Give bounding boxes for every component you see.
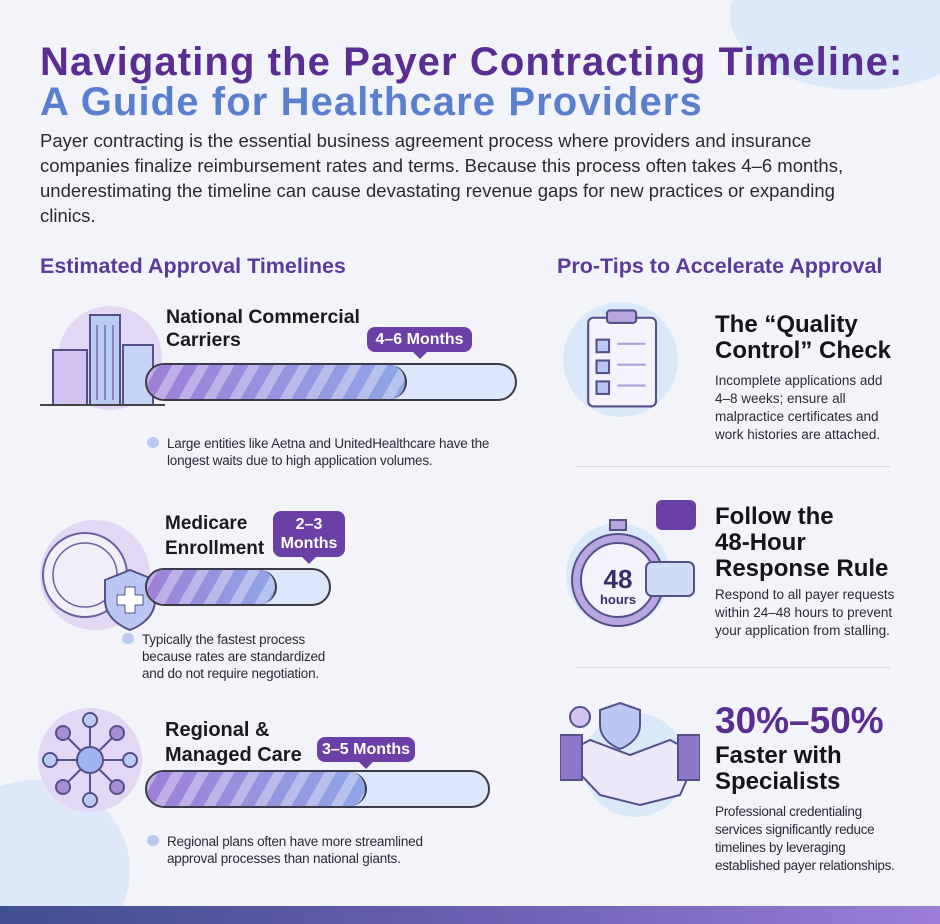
text: The “Quality bbox=[715, 311, 858, 338]
text: Follow the bbox=[715, 503, 834, 530]
label bbox=[165, 513, 264, 559]
tip: 48-hour rule bbox=[566, 500, 894, 638]
panel: national commercial bbox=[40, 306, 517, 468]
footer band bbox=[0, 906, 940, 924]
text: Response Rule bbox=[715, 555, 888, 582]
badge bbox=[273, 511, 345, 557]
icon: handshake bbox=[560, 702, 700, 817]
icon: seal and shield bbox=[40, 520, 156, 631]
tip: quality control: Incomplete applications add bbox=[715, 373, 882, 388]
label bbox=[166, 306, 360, 351]
icon: clipboard bbox=[563, 302, 678, 417]
badge bbox=[367, 327, 472, 352]
tip: specialists: services significantly reduce timelines by leveraging established payer relationships. bbox=[715, 822, 895, 873]
heading: tips: Pro-Tips to Accelerate Approval bbox=[557, 254, 882, 278]
label: Managed Care bbox=[165, 744, 302, 766]
bar bbox=[145, 363, 517, 401]
bar bbox=[145, 770, 490, 808]
icon: stopwatch: hours bbox=[600, 592, 636, 607]
label: National Commercial bbox=[166, 306, 360, 328]
title: Navigating the Payer Contracting Timeline: bbox=[40, 40, 903, 84]
label bbox=[165, 719, 302, 766]
text bbox=[715, 311, 891, 364]
panel: regional bbox=[38, 708, 490, 866]
tip: specialists: Professional credentialing bbox=[715, 804, 862, 819]
icon: city buildings bbox=[40, 306, 165, 410]
label: Enrollment bbox=[165, 538, 264, 559]
title: A Guide for Healthcare Providers bbox=[40, 80, 703, 124]
tip: quality control bbox=[563, 302, 891, 442]
decorative blob top right bbox=[730, 0, 940, 90]
title bbox=[40, 40, 903, 124]
tip: specialists bbox=[560, 700, 895, 873]
badge bbox=[317, 737, 415, 762]
badge: 4–6 Months bbox=[375, 331, 464, 348]
badge: 2–3 bbox=[296, 516, 322, 533]
intro paragraph: Payer contracting is the essential business agreement process where providers and insurance companies finalize reimbursement rates and terms. Because this process often takes 4–6 months, underestimating the timeline can cause devastating revenue gaps for new practices or expanding clinics. bbox=[40, 130, 843, 226]
tip: quality control: 4–8 weeks; ensure all malpractice certificates and work histories are attached. bbox=[715, 391, 880, 442]
icon: stopwatch bbox=[566, 500, 696, 627]
icon: stopwatch: 48 bbox=[604, 564, 632, 594]
text: 30%–50% bbox=[715, 700, 884, 741]
icon: network bbox=[38, 708, 142, 812]
panel: medicare bbox=[40, 511, 345, 681]
tip: specialists: Specialists bbox=[715, 768, 840, 795]
badge: 3–5 Months bbox=[322, 741, 410, 758]
label: Medicare bbox=[165, 513, 247, 534]
heading: timelines: Estimated Approval Timelines bbox=[40, 254, 346, 278]
tip: 48-hour rule: Respond to all payer requests within 24–48 hours to prevent your application from stalling. bbox=[715, 587, 894, 638]
text: Control” Check bbox=[715, 337, 891, 364]
note: Regional plans often have more streamlined approval processes than national giants. bbox=[167, 834, 423, 866]
bar bbox=[145, 568, 331, 606]
text bbox=[715, 503, 888, 582]
text: 48-Hour bbox=[715, 529, 806, 556]
note: Large entities like Aetna and UnitedHealthcare have the longest waits due to high application volumes. bbox=[167, 436, 489, 468]
label: Carriers bbox=[166, 329, 241, 351]
label: Regional & bbox=[165, 719, 269, 741]
badge: Months bbox=[281, 535, 337, 552]
tip: specialists: Faster with bbox=[715, 742, 842, 769]
note: Typically the fastest process because rates are standardized and do not require negotiation. bbox=[142, 632, 325, 681]
